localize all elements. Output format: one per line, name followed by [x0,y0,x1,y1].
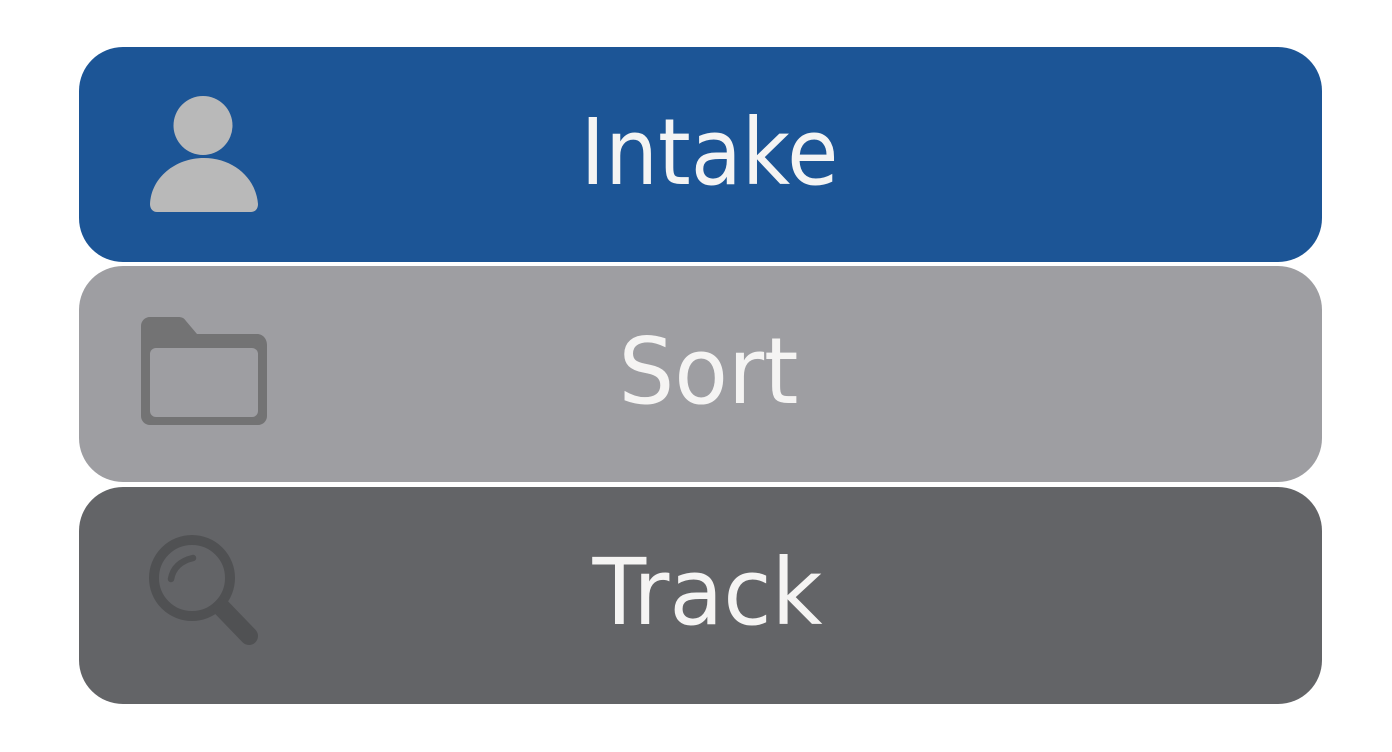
bar: Intake background [79,47,1322,262]
heading: Track: Track [592,539,823,646]
heading: Sort: Sort [618,318,798,425]
heading: Intake: Intake [580,99,838,206]
panel: Track [79,487,1322,704]
panel: Sort [79,266,1322,482]
icon: folder [141,317,267,425]
panel: Intake [79,47,1322,262]
icon: magnifying glass [154,540,249,636]
icon: person [150,96,258,212]
bar: Track background [79,487,1322,704]
bar: Sort background [79,266,1322,482]
